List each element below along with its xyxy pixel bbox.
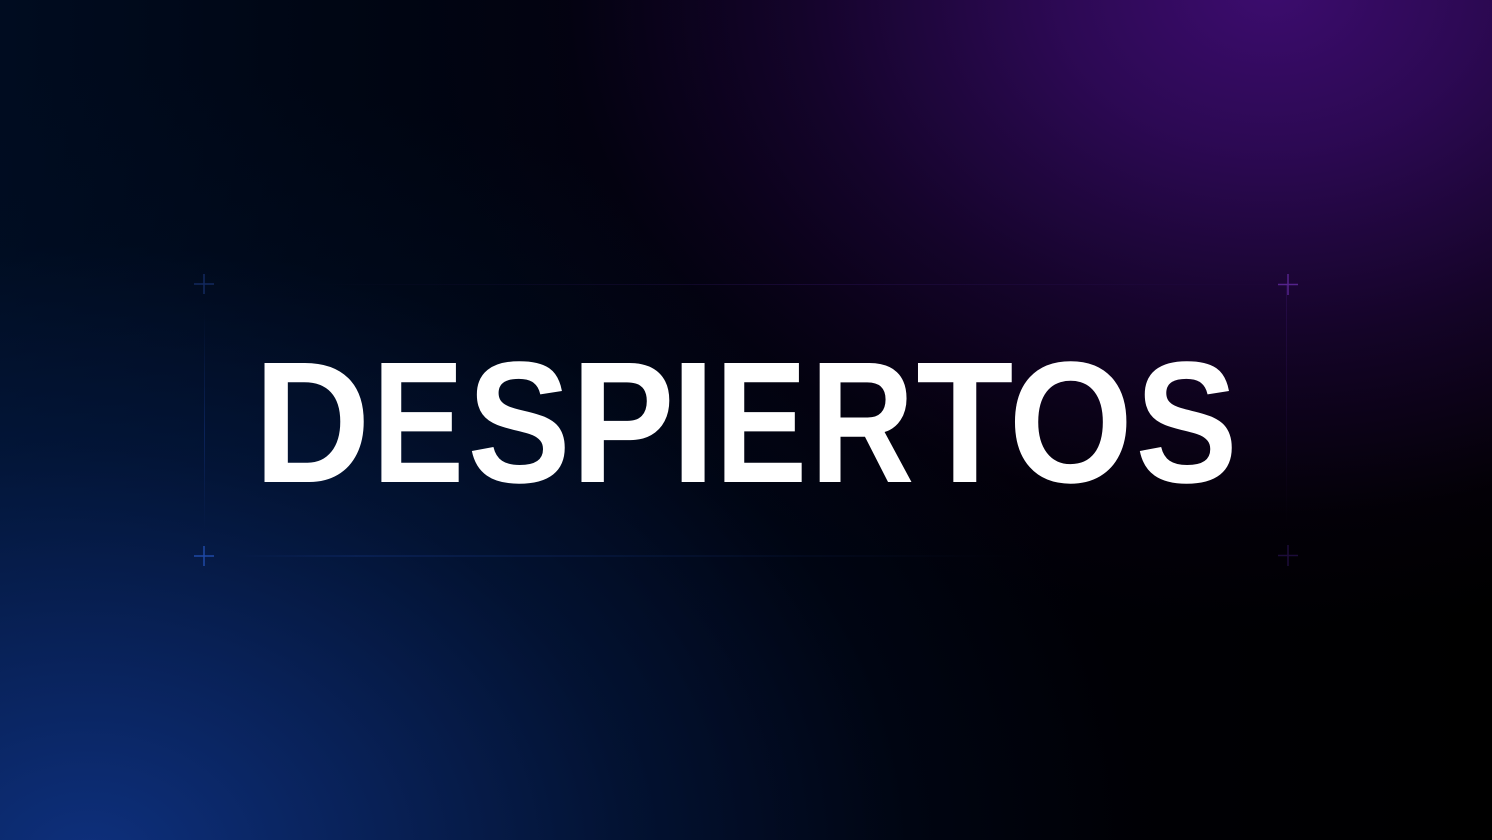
- icon: bottom-right cross: [1278, 545, 1298, 566]
- title: P: [571, 325, 675, 519]
- title: E: [372, 326, 464, 520]
- frame right line: [1286, 284, 1287, 556]
- title: T: [916, 327, 1013, 519]
- frame top line: [204, 284, 1288, 285]
- icon: top-right cross: [1278, 274, 1298, 295]
- title: D: [254, 326, 371, 519]
- title: I: [671, 327, 715, 519]
- title: R: [810, 326, 914, 519]
- title: [254, 325, 1238, 520]
- frame bottom line: [204, 556, 1288, 557]
- title: E: [715, 326, 807, 520]
- title: S: [1135, 325, 1238, 519]
- title: O: [1008, 326, 1133, 519]
- title: S: [467, 325, 571, 519]
- icon: bottom-left cross: [194, 546, 214, 566]
- frame left line: [204, 284, 205, 556]
- icon: top-left cross: [194, 274, 214, 294]
